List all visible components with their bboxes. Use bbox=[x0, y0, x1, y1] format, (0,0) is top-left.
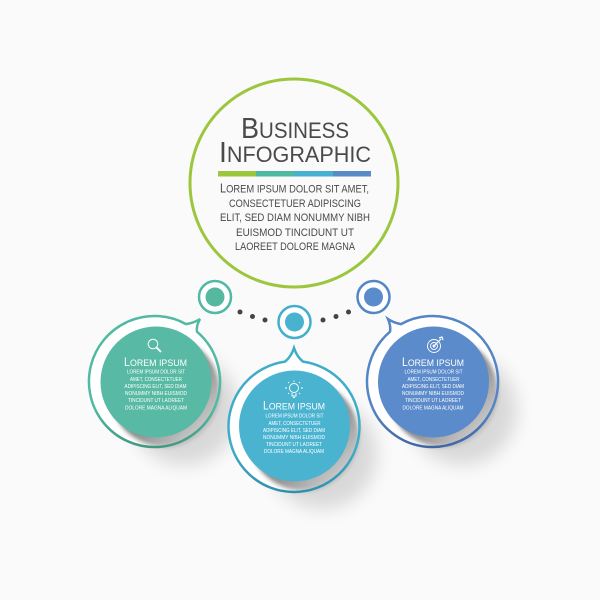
intro text bbox=[220, 182, 370, 253]
icon: target bbox=[428, 337, 443, 352]
disc bbox=[239, 370, 350, 482]
body text: LOREM IPSUM DOLOR SIT bbox=[127, 370, 185, 376]
body text bbox=[402, 370, 464, 412]
marker: indigo bbox=[358, 281, 390, 313]
bubble outline bbox=[367, 316, 498, 447]
body text: TINCIDUNT UT LAOREET bbox=[266, 442, 322, 448]
body text: DOLORE MAGNA ALIQUAM bbox=[264, 449, 324, 455]
soft shadow bbox=[407, 355, 517, 465]
main circle outline bbox=[190, 79, 398, 287]
body text: ADIPISCING ELIT, SED DIAM bbox=[402, 384, 464, 390]
title: INFOGRAPHIC bbox=[219, 137, 371, 169]
bubble outline bbox=[89, 316, 220, 447]
body text: AMET, CONSECTETUER bbox=[130, 377, 182, 383]
disc bbox=[100, 326, 212, 438]
bubble fill bbox=[367, 316, 498, 447]
panel: teal bubble bbox=[89, 316, 239, 465]
bubble fill bbox=[228, 348, 360, 492]
body text: AMET, CONSECTETUER bbox=[268, 421, 320, 427]
title bbox=[219, 113, 371, 169]
disc bbox=[378, 326, 489, 438]
title: BUSINESS bbox=[241, 113, 349, 145]
panel: main circle bbox=[190, 79, 398, 287]
body text: DOLORE MAGNA ALIQUAM bbox=[125, 406, 187, 412]
body text bbox=[124, 370, 187, 412]
bubble fill bbox=[89, 316, 220, 447]
soft shadow bbox=[267, 399, 377, 509]
marker: teal bbox=[199, 281, 231, 313]
intro text: LAOREET DOLORE MAGNA bbox=[235, 241, 356, 253]
heading: LOREM IPSUM bbox=[402, 357, 464, 369]
body text: AMET, CONSECTETUER bbox=[408, 377, 460, 383]
body text: LOREM IPSUM DOLOR SIT bbox=[404, 370, 463, 376]
intro text: LOREM IPSUM DOLOR SIT AMET, bbox=[220, 182, 369, 196]
body text: ADIPISCING ELIT, SED DIAM bbox=[124, 384, 187, 390]
heading: LOREM IPSUM bbox=[263, 400, 325, 412]
soft shadow bbox=[129, 355, 239, 465]
body text: LOREM IPSUM DOLOR SIT bbox=[266, 414, 324, 420]
marker: blue bbox=[278, 306, 310, 338]
intro text: CONSECTETUER ADIPISCING bbox=[229, 198, 361, 210]
color bar bbox=[218, 171, 371, 176]
body text: NONUMMY NIBH EUISMOD bbox=[402, 391, 464, 397]
body text: NONUMMY NIBH EUISMOD bbox=[125, 391, 187, 397]
icon: magnifier bbox=[148, 339, 161, 352]
body text: ADIPISCING ELIT, SED DIAM bbox=[263, 428, 325, 434]
panel: blue bubble bbox=[228, 348, 377, 509]
body text: NONUMMY NIBH EUISMOD bbox=[263, 435, 325, 441]
heading: LOREM IPSUM bbox=[124, 357, 187, 369]
body text bbox=[263, 414, 325, 455]
icon: light bulb bbox=[285, 380, 303, 398]
bubble outline bbox=[228, 348, 360, 492]
intro text: ELIT, SED DIAM NONUMMY NIBH bbox=[220, 212, 370, 224]
crescent shadow bbox=[110, 337, 220, 447]
intro text: EUISMOD TINCIDUNT UT bbox=[236, 227, 354, 239]
connector dots bbox=[238, 310, 351, 322]
body text: TINCIDUNT UT LAOREET bbox=[128, 398, 184, 404]
panel: indigo bubble bbox=[367, 316, 517, 465]
crescent shadow bbox=[388, 337, 498, 447]
body text: TINCIDUNT UT LAOREET bbox=[405, 398, 461, 404]
body text: DOLORE MAGNA ALIQUAM bbox=[402, 406, 464, 412]
crescent shadow bbox=[249, 381, 359, 491]
